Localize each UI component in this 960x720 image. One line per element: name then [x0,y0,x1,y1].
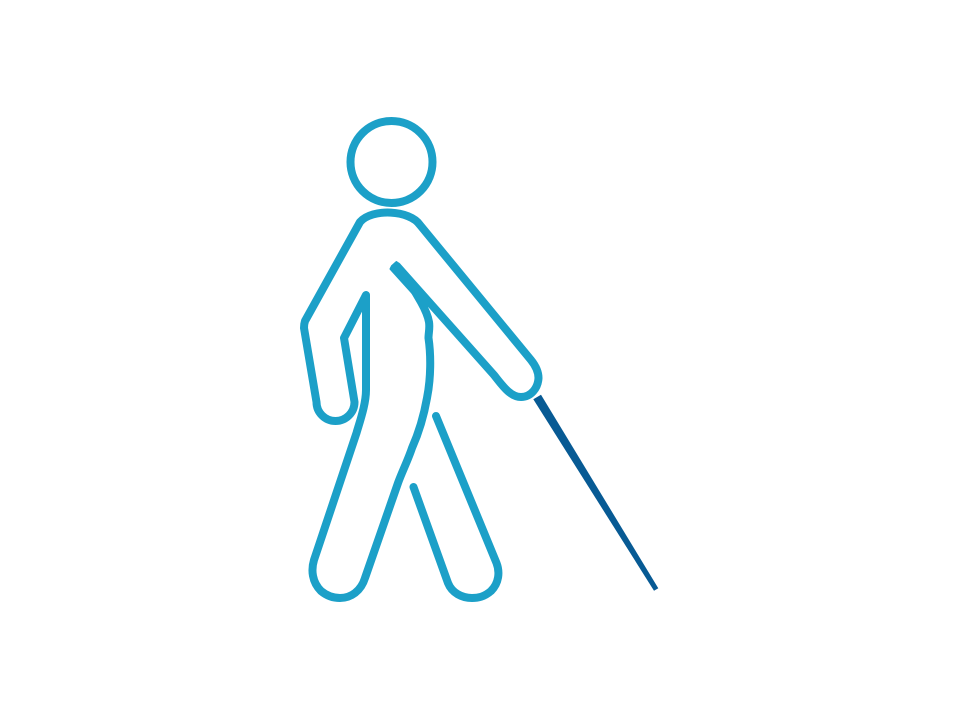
icon: shoulder wedge [390,262,431,306]
front leg [414,416,498,598]
arm, shoulders, hand, inner arm and back leg [304,213,538,598]
icon: head [350,121,432,203]
icon: body outline [304,213,538,598]
icon: white cane [533,395,658,591]
